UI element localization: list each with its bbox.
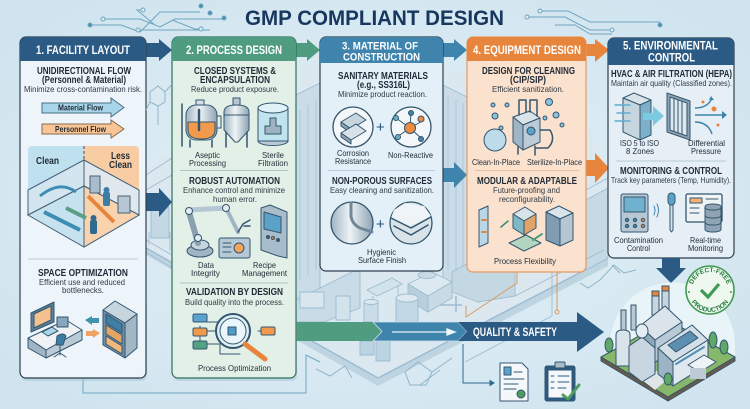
text: space optimization: bottlenecks. [62,285,104,295]
arrow: facility to process lower [146,188,172,217]
circuit traces top right [525,9,662,34]
text: unidirectional flow [24,66,142,94]
text: modular and adaptable: reconfigurability. [499,194,555,204]
text: closed systems [191,66,279,94]
arrow: personnel flow: Personnel Flow [55,124,106,134]
icon: temperature probe [668,193,675,232]
label: data integrity: Data [198,260,214,270]
label: recipe management: Management [242,268,288,278]
arrow: facility to process top [146,39,172,61]
label: process optimization: Process Optimization [198,363,271,373]
text: sanitary materials [338,71,428,99]
heading: 2. PROCESS DESIGN [186,43,282,57]
icon: corrosion resistance [333,107,373,147]
text: hvac and air filtration [611,69,732,88]
panel: 4 equipment design [467,37,586,272]
label: iso zones: ISO 5 to ISO [620,138,659,148]
text: robust automation [183,176,285,204]
heading: 1. FACILITY LAYOUT [36,43,131,57]
icon: exchange arrows [85,316,100,338]
label: contamination control: Contamination [614,235,663,245]
label: hygienic surface finish [358,247,406,265]
text: design for cleaning: DESIGN FOR CLEANING [482,66,575,77]
label: iso zones: 8 Zones [626,146,654,156]
heading: CONSTRUCTION [343,52,420,64]
stamp: defect-free production: PRODUCTION [692,300,728,312]
text: space optimization: SPACE OPTIMIZATION [38,268,128,279]
arrow: equipment to environmental top [586,39,609,62]
label: corrosion resistance: Corrosion [337,148,369,158]
arrow: equipment to environmental lower [586,153,609,183]
label: sterile filtration: Sterile [262,150,284,160]
heading: 5. ENVIRONMENTAL [623,40,718,52]
icon: tank [224,98,249,147]
label: real-time monitoring: Real-time [690,235,721,245]
icon: differential pressure flow [695,96,727,134]
panel: 3 material of construction [320,37,443,271]
icon: process flexibility modules [479,206,573,251]
label: hygienic surface finish: Surface Finish [358,255,406,265]
arrow: material to equipment lower [443,162,467,188]
label: corrosion resistance: Resistance [335,156,371,166]
label: aseptic processing: Processing [189,158,226,168]
title: GMP COMPLIANT DESIGN [245,7,504,30]
text: design for cleaning: Efficient sanitization. [492,84,564,94]
icon: hvac unit [615,93,664,140]
text: design for cleaning: (CIP/SIP) [510,75,546,86]
label: data integrity [191,260,221,278]
text: hvac and air filtration: Maintain air quality (Classified zones). [611,78,732,88]
circuit traces top left [88,4,226,32]
text: monitoring and control [611,166,731,185]
band: quality and safety [296,312,604,352]
text: non-porous surfaces: NON-POROUS SURFACES [332,176,432,187]
text: space optimization: Efficient use and reduced [39,277,125,287]
heading [342,40,420,64]
panel: 1 facility layout [20,37,147,381]
text: closed systems: Reduce product exposure. [191,84,279,94]
heading: 3. MATERIAL OF [342,40,418,52]
icon: process optimization flowchart [193,314,275,359]
label: real-time monitoring [688,235,723,253]
heading: CONTROL [648,52,695,64]
icon: workstation desk [28,302,82,358]
heading [623,40,718,64]
band: quality and safety: QUALITY & SAFETY [473,327,557,339]
label: less clean: Less [111,151,130,162]
label: differential pressure [688,138,725,156]
arrow: material to equipment top [443,39,467,61]
icon: non-reactive molecule [391,107,431,147]
icon: smooth surface finish [390,202,432,244]
arrow: process to material [296,39,320,61]
icon: control box [219,238,250,258]
icon: plus: + [376,119,385,136]
text: robust automation: ROBUST AUTOMATION [189,176,280,187]
label: iso zones [620,138,659,156]
text: non-porous surfaces: Easy cleaning and sanitization. [330,185,434,195]
label: process flexibility: Process Flexibility [494,256,557,266]
label: recipe management [242,260,288,278]
text: unidirectional flow: Minimize cross-contamination risk. [24,84,142,94]
label: clean: Clean [36,156,59,167]
icon: clipboard checklist [545,362,579,401]
stamp: defect-free production [685,265,735,315]
label: hygienic surface finish: Hygienic [367,247,396,257]
icon: real-time database [686,194,722,232]
label: corrosion resistance [335,148,371,166]
diagram: clean and less clean room [28,146,139,247]
label: data integrity: Integrity [191,268,221,278]
label: contamination control [614,235,663,253]
arrow: down to factory [656,258,686,283]
label: non-reactive: Non-Reactive [388,150,433,160]
text: sanitary materials: (e.g., SS316L) [357,80,410,91]
icon: clean-in-place equipment [484,98,564,155]
factory: defect-free production [601,282,735,401]
label: real-time monitoring: Monitoring [688,243,723,253]
text: robust automation: human error. [213,194,257,204]
icon: contamination monitor [621,194,658,232]
text: monitoring and control: MONITORING & CONTROL [620,166,722,177]
label: recipe management: Recipe [253,260,276,270]
text: unidirectional flow: UNIDIRECTIONAL FLOW [37,66,131,77]
label: sterile filtration: Filtration [258,158,288,168]
stamp: defect-free production: DEFECT-FREE [688,267,732,284]
icon: hygienic curved surface [331,202,373,244]
text: space optimization [38,268,128,295]
connector lines [83,272,559,393]
text: unidirectional flow: (Personnel & Material) [42,75,126,86]
label: less clean [109,151,132,171]
text: modular and adaptable: MODULAR & ADAPTABLE [477,176,577,187]
arrow: material flow: Material Flow [58,102,103,112]
label: clean-in-place: Clean-In-Place [472,157,520,167]
text: modular and adaptable: Future-proofing and [493,185,560,195]
text: design for cleaning [482,66,575,94]
arrow: personnel flow [42,120,124,138]
icon: recipe panel [261,205,287,258]
panel: 2 process design [172,37,297,381]
text: validation by design: VALIDATION BY DESIGN [186,287,283,298]
label: aseptic processing [189,150,226,168]
text: modular and adaptable [477,176,577,204]
panel: 5 environmental control [608,38,734,258]
text: sanitary materials: Minimize product reaction. [338,89,427,99]
heading: 4. EQUIPMENT DESIGN [473,43,581,57]
icon: aseptic reactor [182,100,221,147]
icon: document with check [500,363,528,401]
label: differential pressure: Differential [688,138,725,148]
text: closed systems: CLOSED SYSTEMS & [194,66,276,77]
icon: plus: + [376,216,385,233]
label: differential pressure: Pressure [691,146,721,156]
label: sterile filtration [258,150,288,168]
label: less clean: Clean [109,160,132,171]
arrow: material flow [42,98,124,117]
text: validation by design [185,287,284,307]
label: contamination control: Control [627,243,650,253]
text: closed systems: ENCAPSULATION [200,75,270,86]
label: aseptic processing: Aseptic [195,150,220,160]
icon: hepa filter [667,93,690,140]
text: non-porous surfaces [330,176,434,195]
icon: sterile filtration [258,103,288,146]
icon: storage shelf [103,301,137,358]
icon: robot arm [186,204,250,257]
background factory floor [146,65,608,386]
text: sanitary materials: SANITARY MATERIALS [338,71,428,82]
text: validation by design: Build quality into the process. [185,297,284,307]
molecule decorations [146,84,636,385]
text: robust automation: Enhance control and minimize [183,185,285,195]
label: sterilize-in-place: Sterilize-In-Place [527,157,582,167]
